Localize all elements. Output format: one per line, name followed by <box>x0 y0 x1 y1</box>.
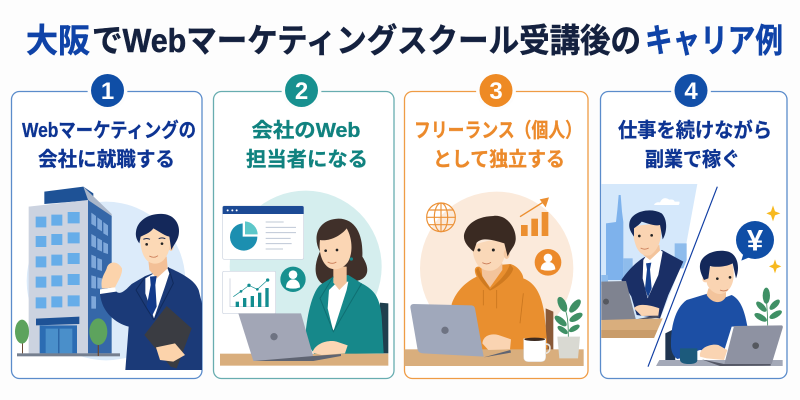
businessman <box>100 267 202 370</box>
heading 1 <box>22 118 196 171</box>
panel 2: in-house web manager <box>214 70 394 378</box>
heading 3: フリーランス（個人） <box>414 119 582 142</box>
heading 4: 副業で稼ぐ <box>645 148 740 171</box>
heading 4: 仕事を続けながら <box>618 118 772 142</box>
person icon <box>535 249 561 276</box>
illustration: freelancer at laptop <box>404 192 584 366</box>
office worker <box>621 250 683 318</box>
number badge 1: 1 <box>101 78 114 105</box>
yen speech bubble <box>736 221 774 261</box>
heading 4 <box>618 118 772 171</box>
illustration: office building and businessman <box>15 187 202 370</box>
number badge 4: 4 <box>684 78 698 105</box>
panel 1: web marketing company <box>12 70 202 378</box>
number badge 2 <box>282 70 322 110</box>
heading 2 <box>246 119 368 171</box>
heading 2: 担当者になる <box>246 148 368 171</box>
illustration: office worker and side-job worker <box>601 184 783 367</box>
illustration: woman with dashboards <box>220 191 388 366</box>
growth chart icon <box>521 212 548 236</box>
number badge 3 <box>476 70 516 110</box>
side-job worker <box>665 329 675 360</box>
number badge 3: 3 <box>489 78 503 105</box>
title: でWebマーケティングスクール受講後の <box>92 22 641 59</box>
panel 4: side job <box>600 70 787 378</box>
sparkles <box>766 205 780 221</box>
heading 2: 会社のWeb <box>252 119 360 142</box>
plant <box>766 295 768 325</box>
heading 3 <box>414 119 582 171</box>
globe icon <box>427 203 455 232</box>
woman <box>375 303 388 353</box>
panel 3: freelance <box>404 70 588 378</box>
heading 1: Webマーケティングの <box>22 118 196 142</box>
man <box>546 308 553 350</box>
number badge 1 <box>88 70 128 110</box>
yen speech bubble: ¥ <box>747 225 764 258</box>
title: 大阪 <box>26 22 90 59</box>
coffee mug <box>524 339 546 362</box>
heading 1: 会社に就職する <box>38 148 175 171</box>
plant <box>557 337 580 358</box>
divider line <box>648 187 717 367</box>
heading 3: として独立する <box>433 148 565 171</box>
number badge 2: 2 <box>295 78 308 105</box>
number badge 4 <box>671 70 711 110</box>
